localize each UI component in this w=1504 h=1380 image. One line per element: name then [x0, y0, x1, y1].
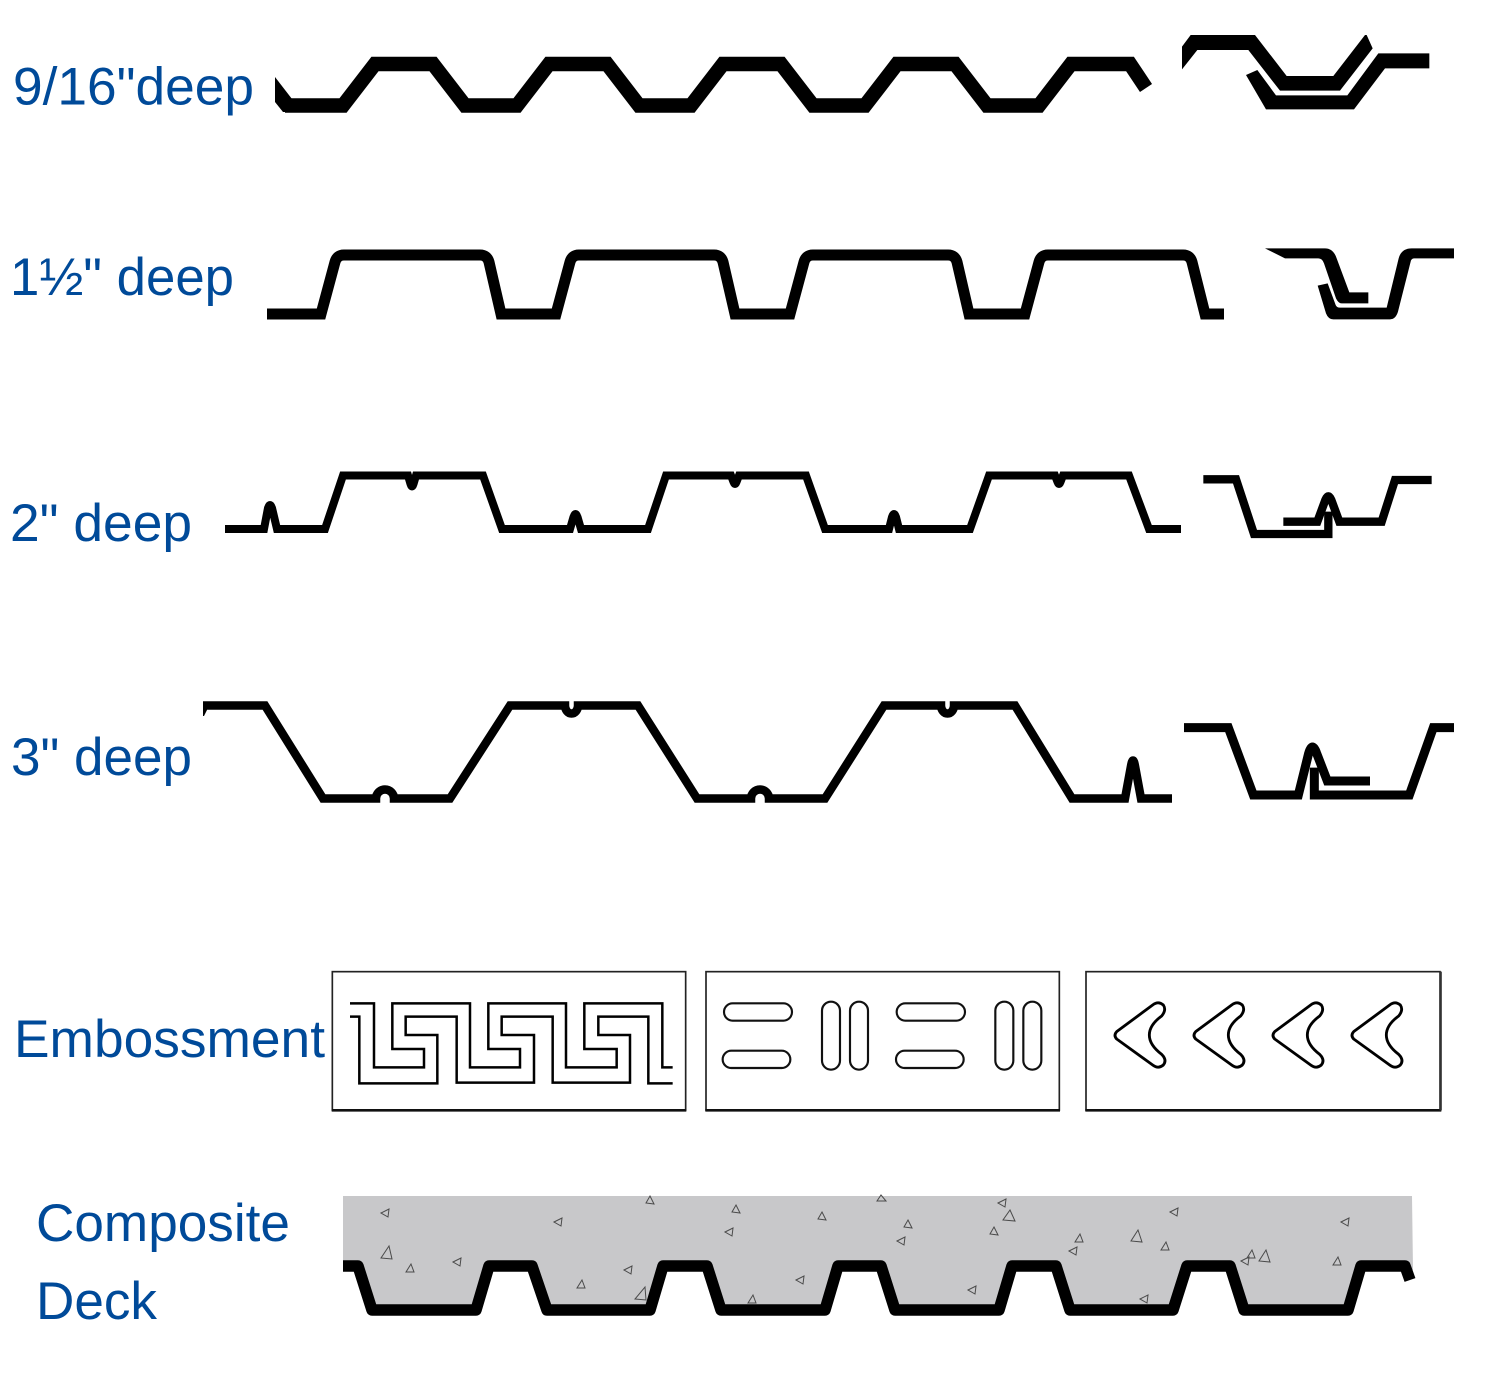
detail: 3 inch side lap: [1184, 728, 1454, 795]
profile: 1.5 inch deck: [267, 255, 1224, 314]
row: embossment patterns: [14, 972, 1441, 1110]
row: 2 inch deep profile: [10, 476, 1432, 553]
label: 3 deep: 3" deep: [11, 728, 192, 787]
detail: 1.5 inch side lap: [1265, 248, 1454, 319]
row: composite deck: [36, 1194, 1413, 1331]
concrete aggregate: [381, 1195, 1349, 1303]
label: Composite Deck: Composite: [36, 1194, 290, 1253]
label: 1 1/2 deep: 1½" deep: [10, 248, 234, 307]
label: Composite Deck: [36, 1194, 290, 1331]
label: 2 deep: 2" deep: [10, 494, 192, 553]
end tick: [203, 702, 207, 716]
label: 9/16 deep: 9/16"deep: [13, 58, 254, 116]
row: 3 inch deep profile: [11, 702, 1454, 798]
profile: 2 inch deck: [225, 476, 1181, 529]
profile: 9/16 inch deck: [275, 64, 1146, 112]
row: 1.5 inch deep profile: [10, 248, 1454, 319]
steel deck profile: [343, 1266, 1410, 1310]
detail: 9/16 inch side lap: [1182, 35, 1429, 109]
concrete slab: [343, 1196, 1413, 1310]
panel: slot pattern embossment: [705, 972, 1060, 1110]
label: Embossment: Embossment: [14, 1010, 325, 1069]
detail: 2 inch side lap: [1203, 479, 1432, 534]
panel: key pattern embossment: [332, 972, 686, 1110]
panel: chevron pattern embossment: [1085, 972, 1441, 1110]
row: 9/16 inch deep profile: [13, 35, 1429, 117]
label: Composite Deck: Deck: [36, 1272, 157, 1331]
profile: 3 inch deck: [203, 706, 1172, 798]
